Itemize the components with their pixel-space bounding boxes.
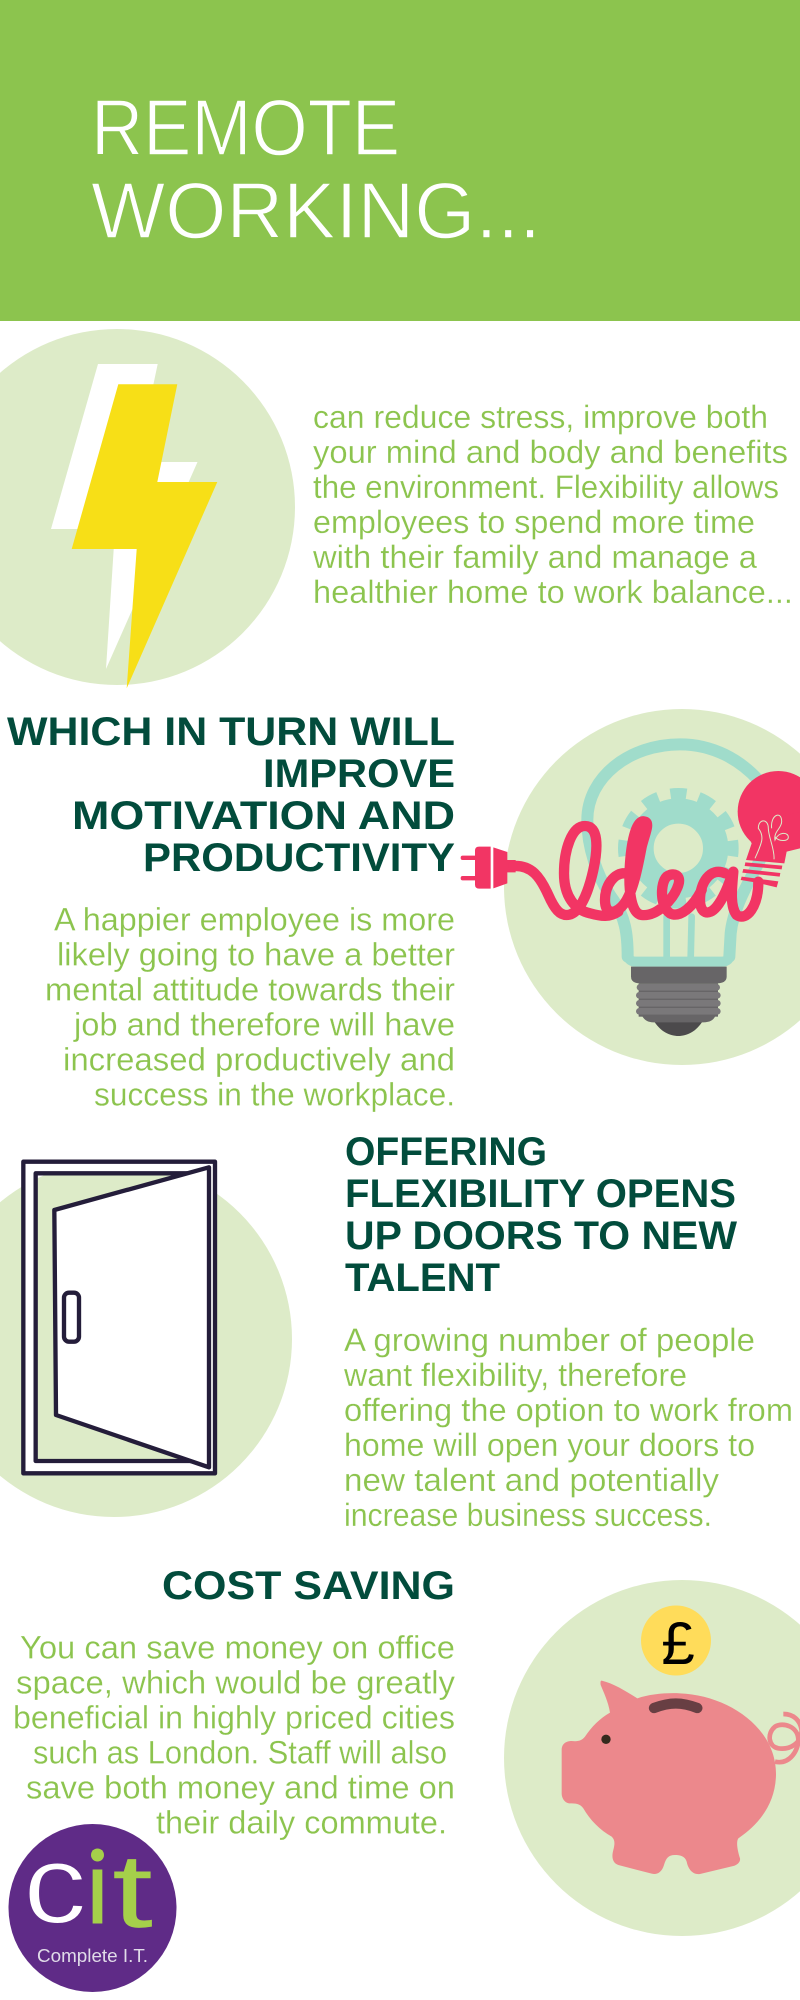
bulb screw base — [631, 967, 727, 1036]
text block: intro: the environment. Flexibility allows — [313, 469, 779, 505]
pig body — [562, 1681, 776, 1874]
heading: WHICH IN TURN WILL — [7, 710, 455, 754]
text block: savings: such as London. Staff will also — [33, 1734, 447, 1770]
text block: happier employee: job and therefore will have — [73, 1006, 455, 1042]
text block: happier employee: mental attitude towards their — [45, 972, 455, 1008]
icon: piggy bank — [562, 1681, 800, 1874]
wire — [513, 821, 758, 917]
pig eye — [601, 1735, 611, 1744]
logo letters — [23, 1822, 153, 1950]
title: WORKING... — [91, 166, 541, 255]
heading — [7, 710, 455, 880]
text block: savings: You can save money on office — [20, 1630, 455, 1666]
text block: savings: their daily commute. — [156, 1804, 447, 1840]
logo wordmark: Complete I.T. — [37, 1945, 148, 1966]
logo letters: t — [112, 1833, 153, 1950]
text block: happier employee: A happier employee is more — [54, 902, 455, 938]
text block: flexibility: A growing number of people — [344, 1322, 755, 1358]
text block: flexibility — [343, 1322, 793, 1533]
heading: MOTIVATION AND — [72, 794, 455, 838]
text block: flexibility: new talent and potentially — [344, 1462, 720, 1498]
icon: open door — [23, 1162, 215, 1473]
icon: lightning bolt — [51, 364, 217, 688]
icon: idea light bulb with plug wire — [461, 744, 800, 1036]
text block: savings: space, which would be greatly — [16, 1664, 456, 1700]
text block: savings — [13, 1630, 456, 1840]
circle backdrop — [504, 709, 800, 1065]
title: REMOTE — [91, 83, 400, 172]
gear — [624, 794, 733, 903]
pig tail — [770, 1714, 800, 1762]
heading: PRODUCTIVITY — [143, 836, 455, 880]
text block: intro — [312, 399, 793, 610]
circle backdrop — [504, 1580, 800, 1936]
heading: COST SAVING — [162, 1564, 455, 1608]
heading: IMPROVE — [263, 752, 455, 796]
bulb outline — [587, 744, 769, 962]
logo letters: c — [23, 1822, 87, 1947]
text block: happier employee: likely going to have a better — [57, 936, 455, 972]
logo: Complete I.T. — [8, 1822, 176, 1992]
icon: pound coin: £ — [661, 1610, 695, 1677]
text block: intro: can reduce stress, improve both — [313, 399, 768, 435]
text block: flexibility: increase business success. — [344, 1497, 712, 1533]
heading: UP DOORS TO NEW — [345, 1214, 737, 1258]
panel: stress reduction — [0, 329, 793, 688]
heading: TALENT — [345, 1256, 500, 1300]
icon: pound coin — [641, 1606, 711, 1677]
text block: happier employee: increased productively and — [63, 1042, 455, 1078]
text block: intro: your mind and body and benefits — [313, 434, 788, 470]
panel: new talent — [0, 1130, 793, 1533]
text block: flexibility: offering the option to work from — [344, 1392, 793, 1428]
plug — [461, 847, 516, 889]
small pink bulb — [738, 771, 800, 887]
circle backdrop — [0, 329, 295, 685]
text block: intro: employees to spend more time — [313, 504, 755, 540]
text block: savings: beneficial in highly priced cities — [13, 1700, 455, 1736]
text block: intro: with their family and manage a — [312, 539, 758, 575]
heading — [345, 1130, 737, 1300]
text block: flexibility: home will open your doors to — [344, 1427, 755, 1463]
coin slot — [654, 1703, 697, 1708]
title — [91, 83, 541, 255]
header band — [0, 0, 800, 321]
logo letters: i — [86, 1833, 108, 1945]
text block: savings: save both money and time on — [26, 1770, 455, 1806]
text block: happier employee — [45, 902, 455, 1112]
panel: cost saving — [13, 1564, 800, 1936]
circle backdrop — [0, 1161, 292, 1517]
text block: happier employee: success in the workplace. — [94, 1076, 455, 1112]
panel: motivation and productivity — [7, 709, 800, 1112]
heading: OFFERING — [345, 1130, 547, 1174]
text block: flexibility: want flexibility, therefore — [343, 1357, 687, 1393]
text block: intro: healthier home to work balance... — [313, 574, 793, 610]
heading: FLEXIBILITY OPENS — [345, 1172, 736, 1216]
